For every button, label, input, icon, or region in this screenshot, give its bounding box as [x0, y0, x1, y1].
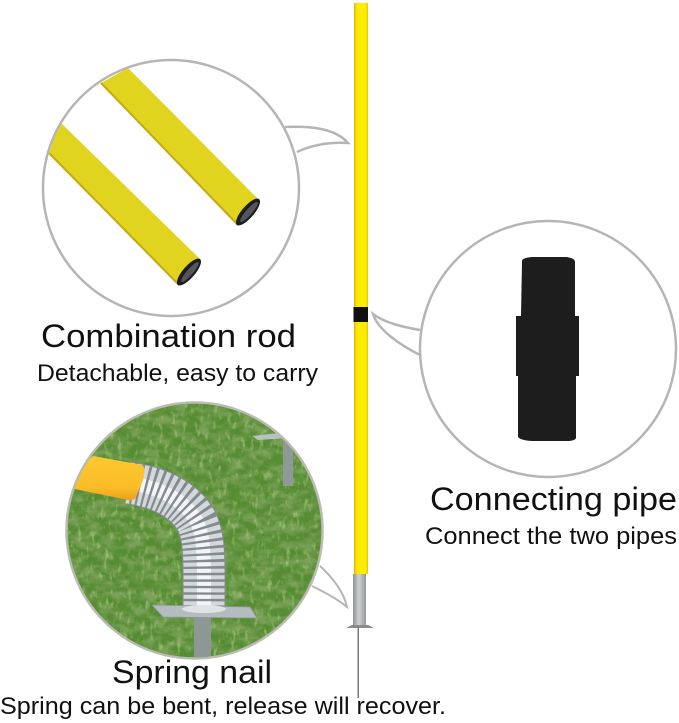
yellow tube	[74, 456, 144, 500]
grass texture	[66, 403, 324, 659]
callout tail	[312, 566, 347, 607]
plate collar	[182, 605, 226, 613]
heading: Connecting pipe	[430, 481, 677, 517]
panel: connecting pipe	[373, 221, 677, 550]
background stake	[252, 433, 293, 486]
base plate	[346, 625, 374, 628]
nail plate	[152, 605, 257, 618]
caption: Spring can be bent, release will recover.	[0, 693, 446, 720]
circle photo	[66, 402, 322, 658]
caption: Detachable, easy to carry	[37, 360, 318, 387]
pole shaft	[354, 3, 368, 574]
panel: spring nail	[0, 402, 446, 720]
callout tail	[285, 127, 348, 152]
heading: Spring nail	[112, 654, 272, 690]
callout tail	[373, 314, 420, 355]
panel: combination rod	[37, 60, 348, 387]
circle	[420, 221, 676, 477]
nail stem	[194, 617, 211, 659]
black connector band	[354, 307, 368, 322]
spring	[128, 483, 204, 606]
heading: Combination rod	[41, 318, 296, 354]
rods	[49, 68, 264, 289]
ground nail	[358, 628, 359, 698]
black connector	[516, 257, 579, 441]
main yellow pole	[346, 3, 374, 698]
metal spring base	[353, 574, 366, 625]
circle	[43, 60, 299, 316]
caption: Connect the two pipes	[425, 523, 677, 550]
